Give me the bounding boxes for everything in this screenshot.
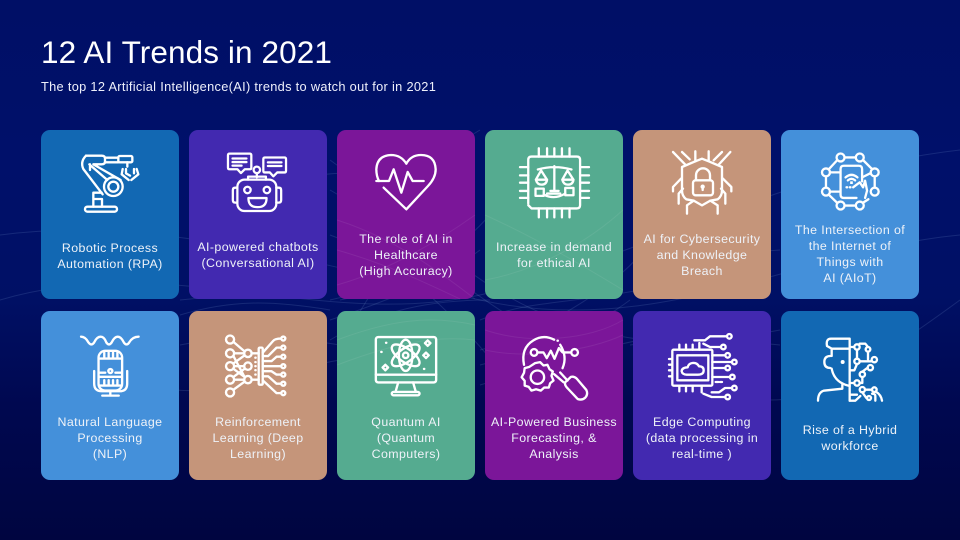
label (491, 414, 617, 460)
icon: smartphone network (820, 152, 880, 211)
label: (Conversational AI) (202, 256, 314, 270)
label: Edge Computing (653, 414, 751, 428)
icon: half human half circuit head (816, 338, 884, 402)
label: AI-powered chatbots (197, 240, 319, 254)
label (371, 414, 441, 460)
panel: ethical AI (485, 130, 623, 299)
label (646, 414, 758, 460)
label: Healthcare (374, 248, 438, 262)
label (496, 240, 612, 270)
panel: AI in Healthcare (337, 130, 475, 299)
label (795, 223, 905, 285)
label: (data processing in (646, 430, 758, 444)
label: Forecasting, & (511, 430, 597, 444)
label (644, 232, 760, 278)
label: Learning (Deep (212, 430, 304, 444)
label: Things with (816, 255, 884, 269)
icon: chip with cloud (668, 332, 738, 400)
icon: chip with scales (518, 147, 590, 218)
label: (High Accuracy) (359, 264, 453, 278)
label: The Intersection of (795, 223, 905, 237)
label: (Quantum (377, 430, 435, 444)
label: Reinforcement (215, 414, 301, 428)
label: Processing (77, 430, 143, 444)
label: The role of AI in (359, 232, 453, 246)
label: Increase in demand (496, 240, 612, 254)
label: Rise of a Hybrid (803, 422, 897, 436)
panel: Business Forecasting (485, 311, 623, 480)
label: the Internet of (809, 239, 891, 253)
label (57, 240, 163, 270)
label: Automation (RPA) (57, 256, 163, 270)
label: Robotic Process (62, 240, 158, 254)
icon: neural network (224, 334, 286, 398)
label: AI (AIoT) (823, 271, 877, 285)
label (803, 422, 897, 452)
label (212, 414, 304, 460)
label: (NLP) (93, 446, 127, 460)
label: and Knowledge (657, 248, 747, 262)
panel: Robotic Process Automation (41, 130, 179, 299)
label: real-time ) (672, 446, 732, 460)
panel: Quantum AI (337, 311, 475, 480)
label (359, 232, 453, 278)
label: Natural Language (58, 414, 162, 428)
label: Computers) (372, 446, 440, 460)
label: for ethical AI (517, 256, 591, 270)
panel: Reinforcement Learning (189, 311, 327, 480)
icon: heart with pulse (375, 154, 437, 211)
title: 12 AI Trends in 2021 (41, 34, 332, 70)
label: Learning) (230, 446, 286, 460)
icon: circuit shield lock (672, 150, 732, 215)
panel: Edge Computing (633, 311, 771, 480)
subtitle: The top 12 Artificial Intelligence(AI) trends to watch out for in 2021 (41, 79, 436, 94)
label: Breach (681, 264, 723, 278)
label: AI-Powered Business (491, 414, 617, 428)
panel: Hybrid workforce (781, 311, 919, 480)
icon: chatbot (226, 152, 288, 212)
icon: microphone with sound wave (80, 336, 140, 397)
panel: NLP (41, 311, 179, 480)
label: AI for Cybersecurity (644, 232, 760, 246)
icon: magnifier, gear and chart (520, 336, 588, 401)
label: Analysis (529, 446, 579, 460)
label: Quantum AI (371, 414, 441, 428)
panel: AIoT (781, 130, 919, 299)
label (197, 240, 319, 270)
panel: Cybersecurity (633, 130, 771, 299)
label (58, 414, 162, 460)
panel: AI-powered chatbots (189, 130, 327, 299)
icon: monitor with atom (374, 336, 438, 396)
label: workforce (821, 438, 879, 452)
icon: robot arm (81, 154, 140, 213)
